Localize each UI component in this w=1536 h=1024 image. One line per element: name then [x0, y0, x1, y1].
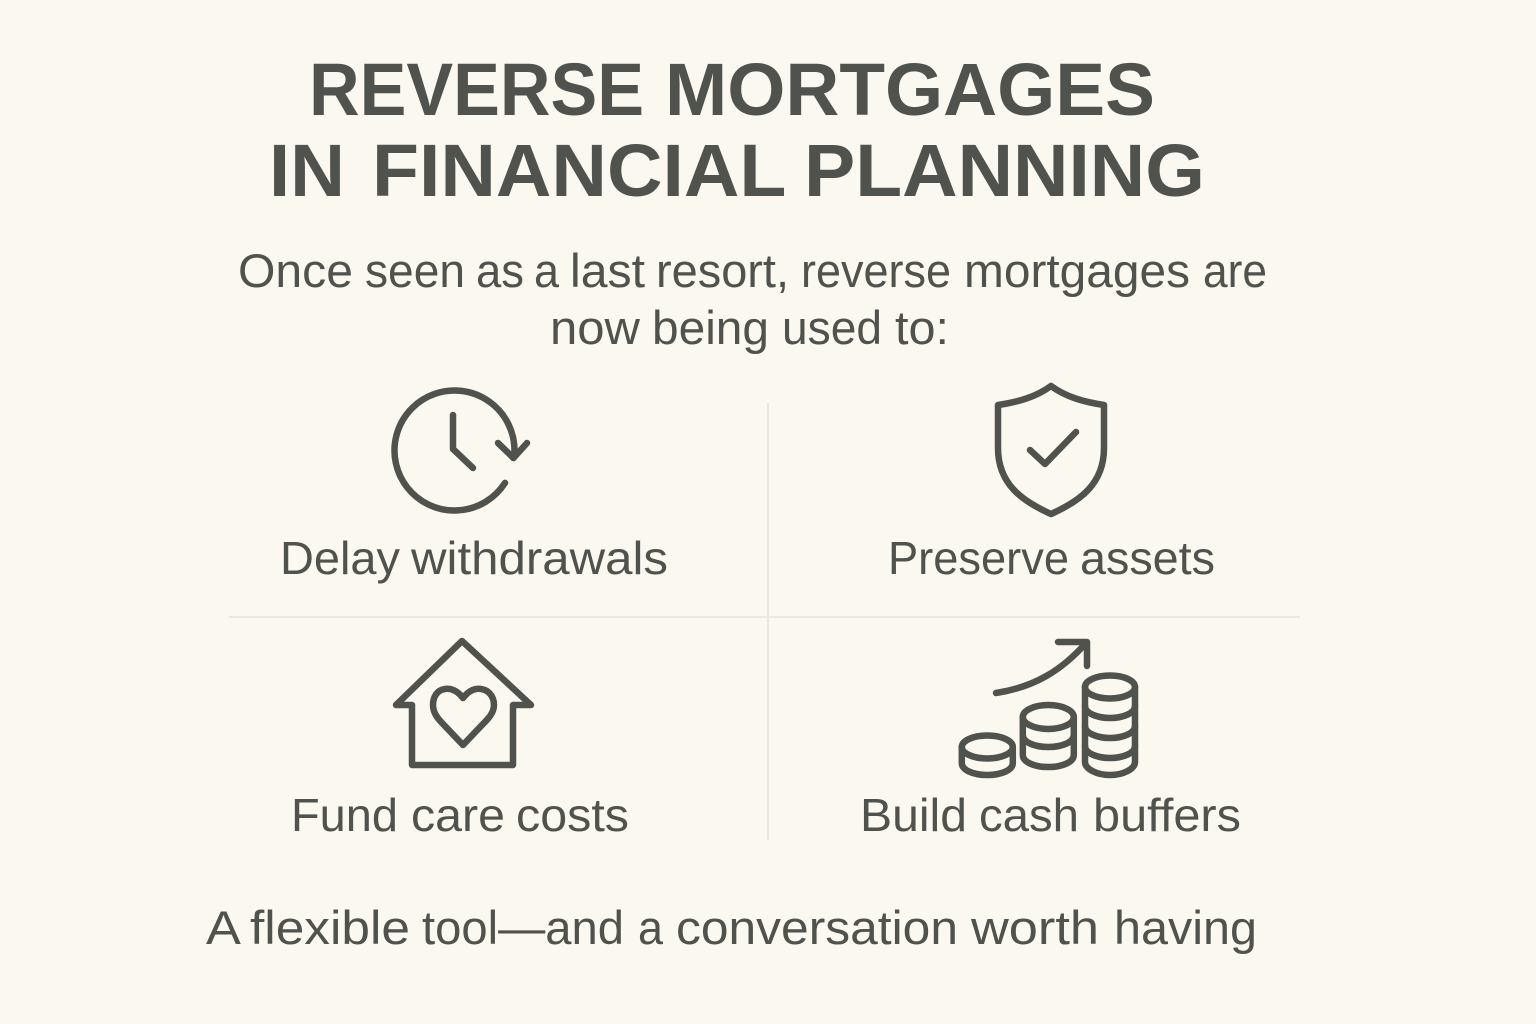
- title: REVERSE: [309, 48, 644, 131]
- icon: house with heart: [396, 641, 531, 765]
- label: fund care costs: costs: [516, 789, 629, 841]
- panel: delay withdrawals: [280, 391, 668, 584]
- title: FINANCIAL: [372, 129, 785, 212]
- title: IN: [269, 129, 345, 212]
- intro text: as: [476, 244, 524, 297]
- title: PLANNING: [804, 129, 1205, 212]
- icon: shield with check: [998, 386, 1104, 514]
- intro text: to:: [895, 301, 949, 354]
- closing line: a: [638, 901, 664, 954]
- label: build cash buffers: cash: [979, 789, 1079, 841]
- icon: clock with arrow: [395, 391, 527, 511]
- intro text: now: [550, 301, 641, 354]
- title: [269, 48, 1205, 212]
- closing line: A: [206, 901, 242, 954]
- closing line: having: [1114, 901, 1257, 954]
- intro text: are: [1203, 244, 1267, 297]
- label: delay withdrawals: Delay: [280, 532, 400, 584]
- panel: preserve assets: [888, 386, 1215, 584]
- label: fund care costs: Fund: [291, 789, 398, 841]
- label: build cash buffers: buffers: [1093, 789, 1241, 841]
- intro text: a: [534, 244, 560, 297]
- intro text: being: [652, 301, 769, 354]
- intro text: Once: [238, 244, 353, 297]
- closing line: tool—and: [422, 901, 624, 954]
- label: preserve assets: assets: [1080, 532, 1215, 584]
- intro text: [238, 244, 1267, 354]
- closing line: flexible: [250, 901, 410, 954]
- intro text: used: [782, 301, 882, 354]
- title: MORTGAGES: [665, 48, 1155, 131]
- intro text: last: [570, 244, 645, 297]
- label: fund care costs: care: [411, 789, 505, 841]
- intro text: resort,: [656, 244, 789, 297]
- label: delay withdrawals: withdrawals: [410, 532, 668, 584]
- intro text: reverse: [801, 244, 951, 297]
- intro text: seen: [365, 244, 465, 297]
- icon: coin stacks with rising arrow: [962, 642, 1135, 775]
- label: preserve assets: Preserve: [888, 532, 1069, 584]
- closing line: worth: [970, 901, 1099, 954]
- label: build cash buffers: Build: [860, 789, 967, 841]
- closing line: conversation: [676, 901, 958, 954]
- panel: fund care costs: [291, 641, 629, 841]
- intro text: mortgages: [964, 244, 1190, 297]
- panel: build cash buffers: [860, 642, 1241, 841]
